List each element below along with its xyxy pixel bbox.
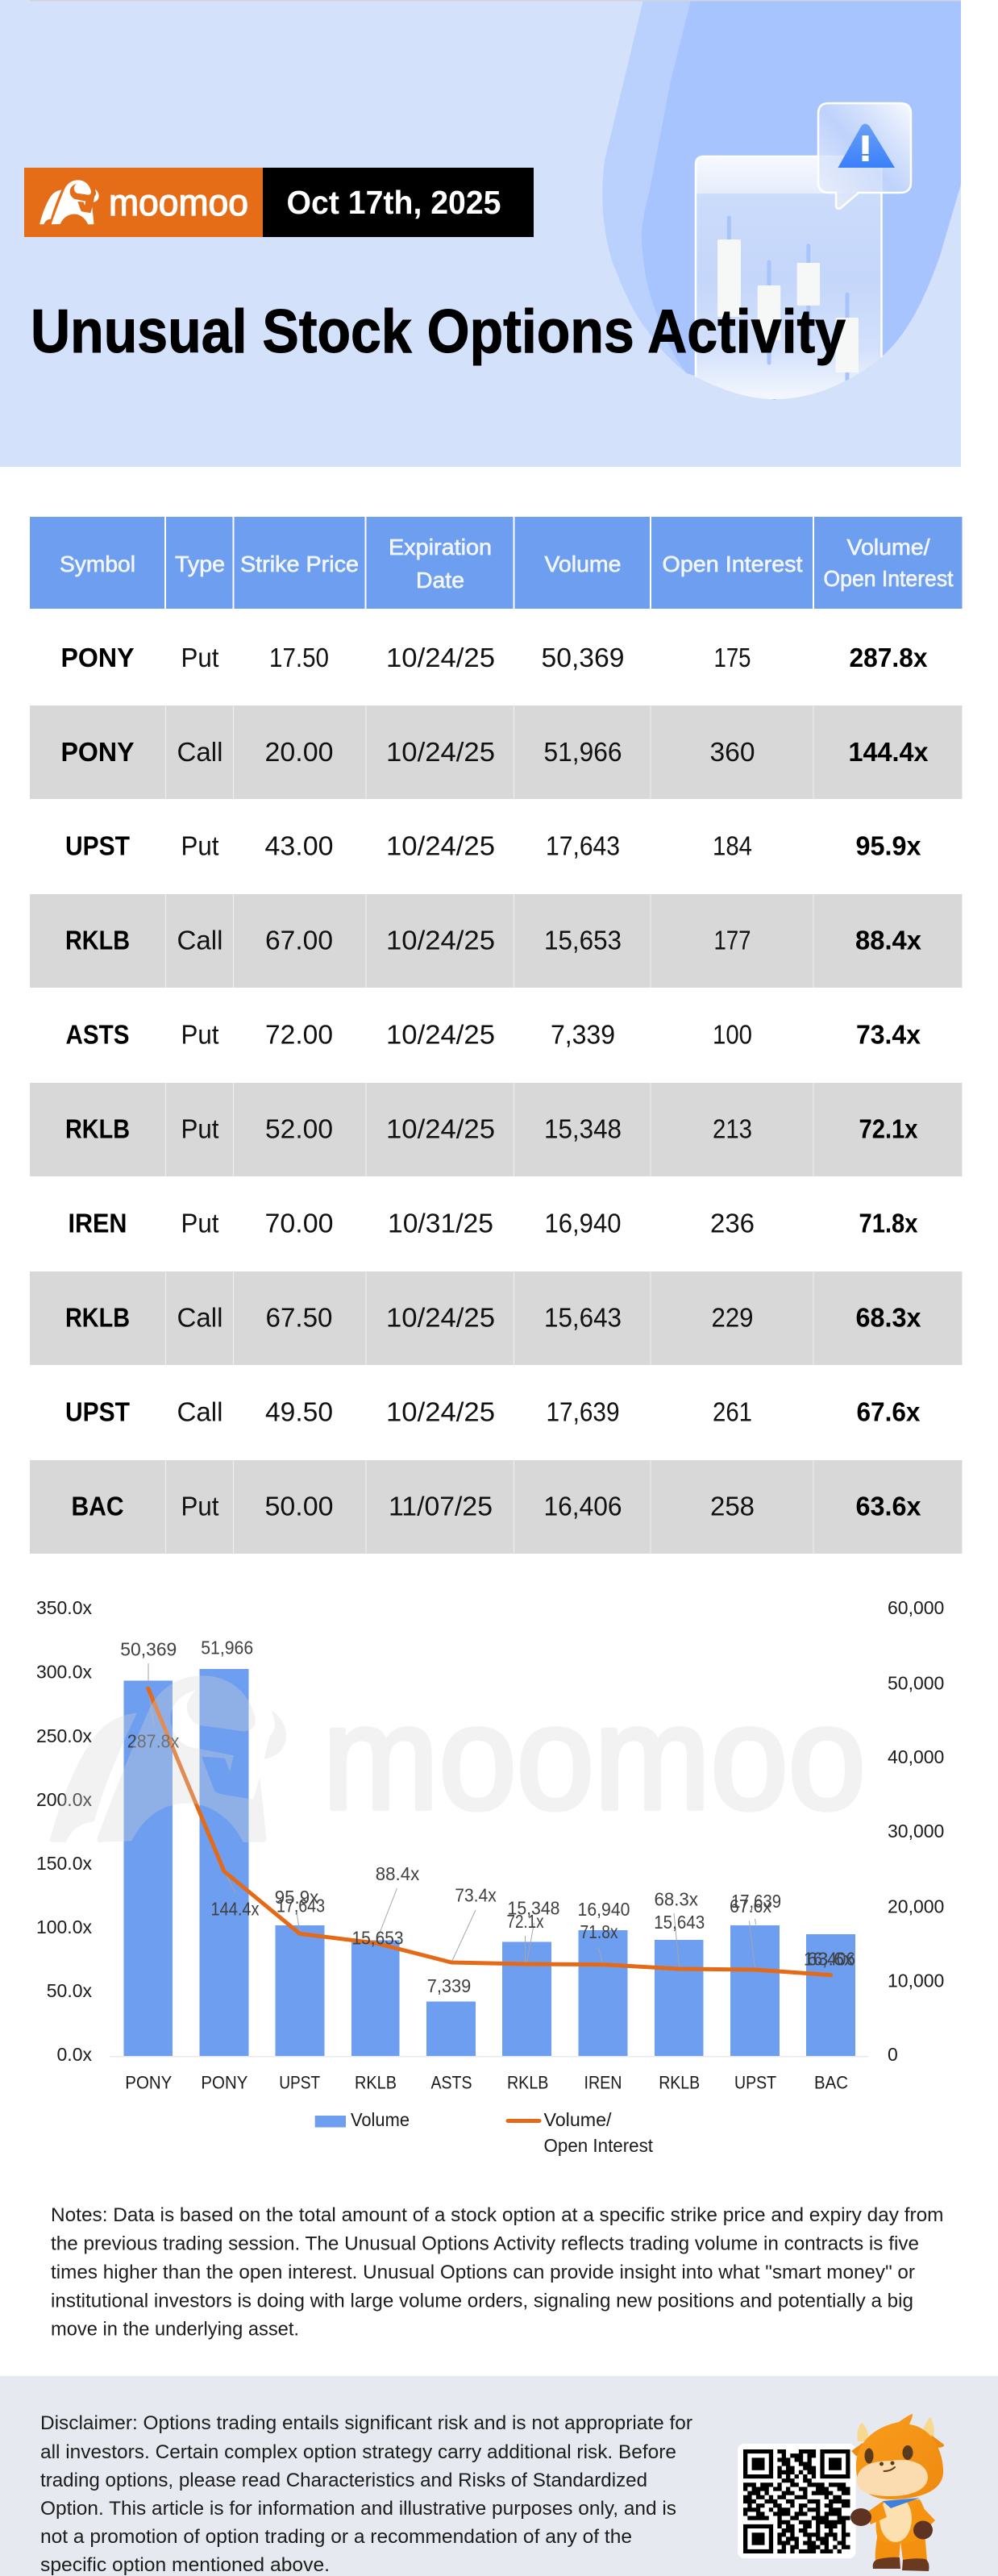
- left axis labels: 250.0x: [36, 1725, 92, 1746]
- table row 3: 43.00: [264, 830, 334, 861]
- mascot eyes: [864, 2445, 913, 2466]
- banner background curve: light: [602, 0, 961, 400]
- notes text block: institutional investors is doing with large volume orders, signaling new positions and potentially a big: [51, 2290, 913, 2312]
- table row 1: 17.50: [269, 643, 329, 672]
- right axis labels: [888, 1597, 944, 2065]
- data labels: 68.3x: [654, 1888, 698, 1909]
- table row 10: 50.00: [264, 1492, 334, 1521]
- table row 9: 17,639: [547, 1396, 619, 1427]
- table row 5: 100: [713, 1019, 752, 1050]
- left axis labels: 350.0x: [36, 1597, 92, 1618]
- table row 10: 63.6x: [856, 1492, 921, 1521]
- left axis labels: 200.0x: [36, 1789, 92, 1810]
- table row 7: 70.00: [264, 1208, 334, 1238]
- illustration: stock chart card: [695, 156, 882, 402]
- category labels: PONY: [201, 2072, 248, 2093]
- table row 6: 52.00: [265, 1114, 333, 1143]
- table row 3: 17,643: [546, 830, 620, 861]
- category labels: UPST: [734, 2072, 776, 2093]
- table header: Volume: [545, 551, 621, 576]
- table row 9: 49.50: [265, 1396, 333, 1427]
- table row 6: 10/24/25: [386, 1114, 495, 1143]
- date badge: Oct 17th, 2025: [287, 184, 501, 221]
- right axis labels: 60,000: [888, 1597, 944, 1618]
- table row 3: UPST: [65, 830, 130, 861]
- table row 3: [65, 830, 921, 861]
- table row 9: UPST: [65, 1396, 130, 1427]
- data labels: 63.6x: [807, 1948, 855, 1969]
- table row 6: 72.1x: [859, 1114, 918, 1143]
- data labels: 16,406: [804, 1948, 855, 1969]
- table row 1: 10/24/25: [386, 643, 495, 672]
- table row 5: Put: [181, 1019, 219, 1050]
- left axis labels: [36, 1597, 92, 2065]
- icon: moomoo bull: [40, 180, 99, 224]
- date badge: [263, 168, 534, 237]
- disclaimer text block: all investors. Certain complex option strategy carry additional risk. Before: [40, 2441, 676, 2463]
- right axis labels: 40,000: [888, 1746, 944, 1767]
- table row 1: 50,369: [542, 643, 624, 672]
- table row 7: [68, 1208, 918, 1238]
- table row 5: [66, 1019, 921, 1050]
- table header: Type: [175, 551, 225, 576]
- watermark: moomoo logo: moomoo: [322, 1674, 866, 1840]
- chart legend: volume/open interest: [508, 2109, 654, 2156]
- table row 1: 287.8x: [850, 643, 928, 672]
- watermark: moomoo logo: [49, 1674, 866, 1842]
- table row 8: 15,643: [544, 1303, 622, 1332]
- mascot: moomoo cow: [850, 2414, 944, 2571]
- table row 3: 10/24/25: [386, 830, 495, 861]
- table row 9: 261: [713, 1396, 752, 1427]
- table row 3: 95.9x: [856, 830, 921, 861]
- data labels: 144.4x: [211, 1898, 260, 1919]
- table header: Date: [416, 568, 464, 593]
- table header: Symbol: [60, 551, 135, 576]
- table row 10: [30, 1460, 963, 1554]
- leader lines: [148, 1663, 756, 1969]
- mascot muzzle: [857, 2460, 928, 2496]
- data labels: 50,369: [120, 1638, 177, 1659]
- data labels: 287.8x: [127, 1730, 180, 1751]
- disclaimer text block: not a promotion of option trading or a recommendation of any of the: [40, 2526, 632, 2548]
- table row 2: PONY: [61, 737, 134, 767]
- table row 8: Call: [177, 1303, 222, 1332]
- data labels: 67.6x: [730, 1896, 771, 1916]
- data labels: 95.9x: [275, 1887, 319, 1908]
- left axis labels: 300.0x: [36, 1661, 92, 1682]
- data labels: 88.4x: [376, 1863, 420, 1884]
- table row 4: 15,653: [544, 926, 622, 955]
- table row 8: 229: [711, 1303, 753, 1332]
- table row 5: 72.00: [265, 1019, 333, 1050]
- table row 5: ASTS: [66, 1019, 129, 1050]
- table row 9: 10/24/25: [386, 1396, 495, 1427]
- category labels: IREN: [584, 2072, 622, 2093]
- left axis labels: 100.0x: [36, 1916, 92, 1937]
- table row 2: Call: [177, 737, 222, 767]
- notes text block: Notes: Data is based on the total amount of a stock option at a specific strike price and expiry day from: [51, 2204, 943, 2226]
- left axis labels: 0.0x: [57, 2044, 92, 2065]
- right axis labels: 30,000: [888, 1821, 944, 1841]
- table row 3: Put: [181, 830, 219, 861]
- right axis labels: 0: [888, 2044, 898, 2065]
- mascot arms: [866, 2502, 887, 2524]
- table row 10: 258: [710, 1492, 755, 1521]
- volume bars: [124, 1669, 855, 2056]
- table row 2: [30, 705, 963, 799]
- notes text block: the previous trading session. The Unusual Options Activity reflects trading volume in contracts is five: [51, 2233, 919, 2254]
- table row 10: 11/07/25: [389, 1492, 493, 1521]
- data labels: 15,643: [654, 1912, 705, 1933]
- table row 6: 213: [713, 1114, 752, 1143]
- table row 4: [30, 894, 963, 988]
- logo wordmark: moomoo: [109, 181, 248, 223]
- left axis labels: 50.0x: [47, 1980, 92, 2001]
- table row 7: 10/31/25: [388, 1208, 493, 1238]
- table row 2: 20.00: [264, 737, 334, 767]
- table header: Strike Price: [240, 551, 359, 576]
- table row 5: 7,339: [551, 1019, 615, 1050]
- table row 1: 175: [714, 643, 751, 672]
- table row 9: 67.6x: [856, 1396, 921, 1427]
- disclaimer text block: specific option mentioned above.: [40, 2554, 330, 2576]
- table row 3: 184: [713, 830, 752, 861]
- data labels: 15,348: [508, 1898, 559, 1919]
- table header: [30, 517, 963, 609]
- notes text block: times higher than the open interest. Unusual Options can provide insight into what "smart money" or: [51, 2262, 915, 2283]
- category labels: ASTS: [430, 2072, 472, 2093]
- data labels: 17,643: [277, 1895, 325, 1916]
- table row 4: 10/24/25: [386, 926, 495, 955]
- mascot head: [856, 2414, 943, 2499]
- table row 10: BAC: [71, 1492, 124, 1521]
- left axis labels: 150.0x: [36, 1853, 92, 1874]
- data labels: 7,339: [427, 1975, 471, 1996]
- data labels: 15,653: [351, 1927, 403, 1948]
- table row 10: Put: [181, 1492, 219, 1521]
- illustration: alert speech bubble: [818, 103, 911, 209]
- table row 1: Put: [181, 643, 219, 672]
- table row 4: Call: [177, 926, 222, 955]
- table row 7: 236: [710, 1208, 755, 1238]
- table row 7: 71.8x: [859, 1208, 918, 1238]
- candlestick wicks: [729, 218, 847, 395]
- header banner: [0, 0, 961, 467]
- table row 5: 10/24/25: [386, 1019, 495, 1050]
- table row 8: RKLB: [65, 1303, 130, 1332]
- table row 2: 10/24/25: [386, 737, 495, 767]
- table row 6: 15,348: [544, 1114, 622, 1143]
- QR code: [738, 2444, 856, 2558]
- mascot torso: [876, 2499, 927, 2544]
- data labels: 71.8x: [580, 1921, 618, 1942]
- table row 9: [65, 1396, 921, 1427]
- table header: Open Interest: [663, 551, 803, 576]
- table row 9: Call: [177, 1396, 222, 1427]
- data labels: 51,966: [201, 1637, 253, 1658]
- data labels: 72.1x: [506, 1911, 544, 1932]
- disclaimer text block: Disclaimer: Options trading entails significant risk and is not appropriate for: [40, 2412, 692, 2434]
- disclaimer text block: [40, 2412, 692, 2576]
- mascot mouth: [884, 2467, 895, 2471]
- table row 2: 360: [709, 737, 755, 767]
- table row 8: 10/24/25: [386, 1303, 495, 1332]
- category labels: RKLB: [507, 2072, 548, 2093]
- data labels: 17,639: [731, 1891, 781, 1912]
- logo badge: [24, 168, 263, 237]
- table row 7: 16,940: [545, 1208, 621, 1238]
- data labels: [120, 1637, 855, 1996]
- mascot legs and boots: [875, 2532, 927, 2561]
- table row 8: 67.50: [266, 1303, 332, 1332]
- disclaimer text block: Option. This article is for information and illustrative purposes only, and is: [40, 2498, 676, 2520]
- table row 2: 51,966: [543, 737, 622, 767]
- footer panel: [0, 2376, 998, 2576]
- category labels: RKLB: [355, 2072, 397, 2093]
- right axis labels: 10,000: [888, 1970, 944, 1991]
- table row 1: [61, 643, 928, 672]
- table row 10: 16,406: [543, 1492, 622, 1521]
- ratio line: [148, 1688, 830, 1975]
- mascot scarf: [883, 2498, 920, 2508]
- table row 2: 144.4x: [848, 737, 929, 767]
- category labels: BAC: [814, 2072, 848, 2093]
- table header: Expiration: [389, 535, 492, 560]
- chart legend: volume: Volume: [351, 2109, 410, 2130]
- data labels: 73.4x: [455, 1885, 497, 1906]
- table row 7: IREN: [68, 1208, 127, 1238]
- category labels: [125, 2072, 848, 2093]
- category labels: RKLB: [659, 2072, 700, 2093]
- table row 8: [30, 1271, 963, 1365]
- right axis labels: 50,000: [888, 1672, 944, 1693]
- chart legend: volume/open interest: Open Interest: [543, 2135, 654, 2156]
- mascot horns and ears: [857, 2423, 868, 2441]
- table row 6: Put: [181, 1114, 219, 1143]
- table header: Open Interest: [824, 566, 954, 591]
- table row 6: RKLB: [65, 1114, 130, 1143]
- right axis labels: 20,000: [888, 1896, 944, 1917]
- notes text block: [51, 2204, 943, 2340]
- category labels: UPST: [279, 2072, 320, 2093]
- table row 4: 177: [714, 926, 751, 955]
- table row 4: 88.4x: [855, 926, 922, 955]
- chart legend: volume: [315, 2109, 410, 2130]
- table row 6: [30, 1083, 963, 1176]
- table row 8: 68.3x: [856, 1303, 921, 1332]
- disclaimer text block: trading options, please read Characteristics and Risks of Standardized: [40, 2470, 647, 2491]
- candlestick bodies: [717, 239, 859, 372]
- mascot hands: [850, 2508, 871, 2526]
- table row 4: RKLB: [65, 926, 130, 955]
- combo chart: volume bars and volume/open interest line: [36, 1597, 944, 2156]
- category labels: PONY: [125, 2072, 173, 2093]
- banner background curve: dark: [642, 0, 961, 400]
- title: Unusual Stock Options Activity: [31, 298, 846, 366]
- table row 1: PONY: [61, 643, 134, 672]
- table row 5: 73.4x: [856, 1019, 921, 1050]
- icon: warning triangle: [838, 124, 895, 168]
- options table: [30, 517, 963, 1554]
- mascot belly: [879, 2495, 912, 2542]
- chart legend: volume/open interest: Volume/: [543, 2109, 612, 2130]
- table header: Volume/: [846, 535, 930, 560]
- data labels: 16,940: [577, 1899, 630, 1920]
- table row 4: 67.00: [265, 926, 333, 955]
- table row 7: Put: [181, 1208, 219, 1238]
- notes text block: move in the underlying asset.: [51, 2319, 299, 2340]
